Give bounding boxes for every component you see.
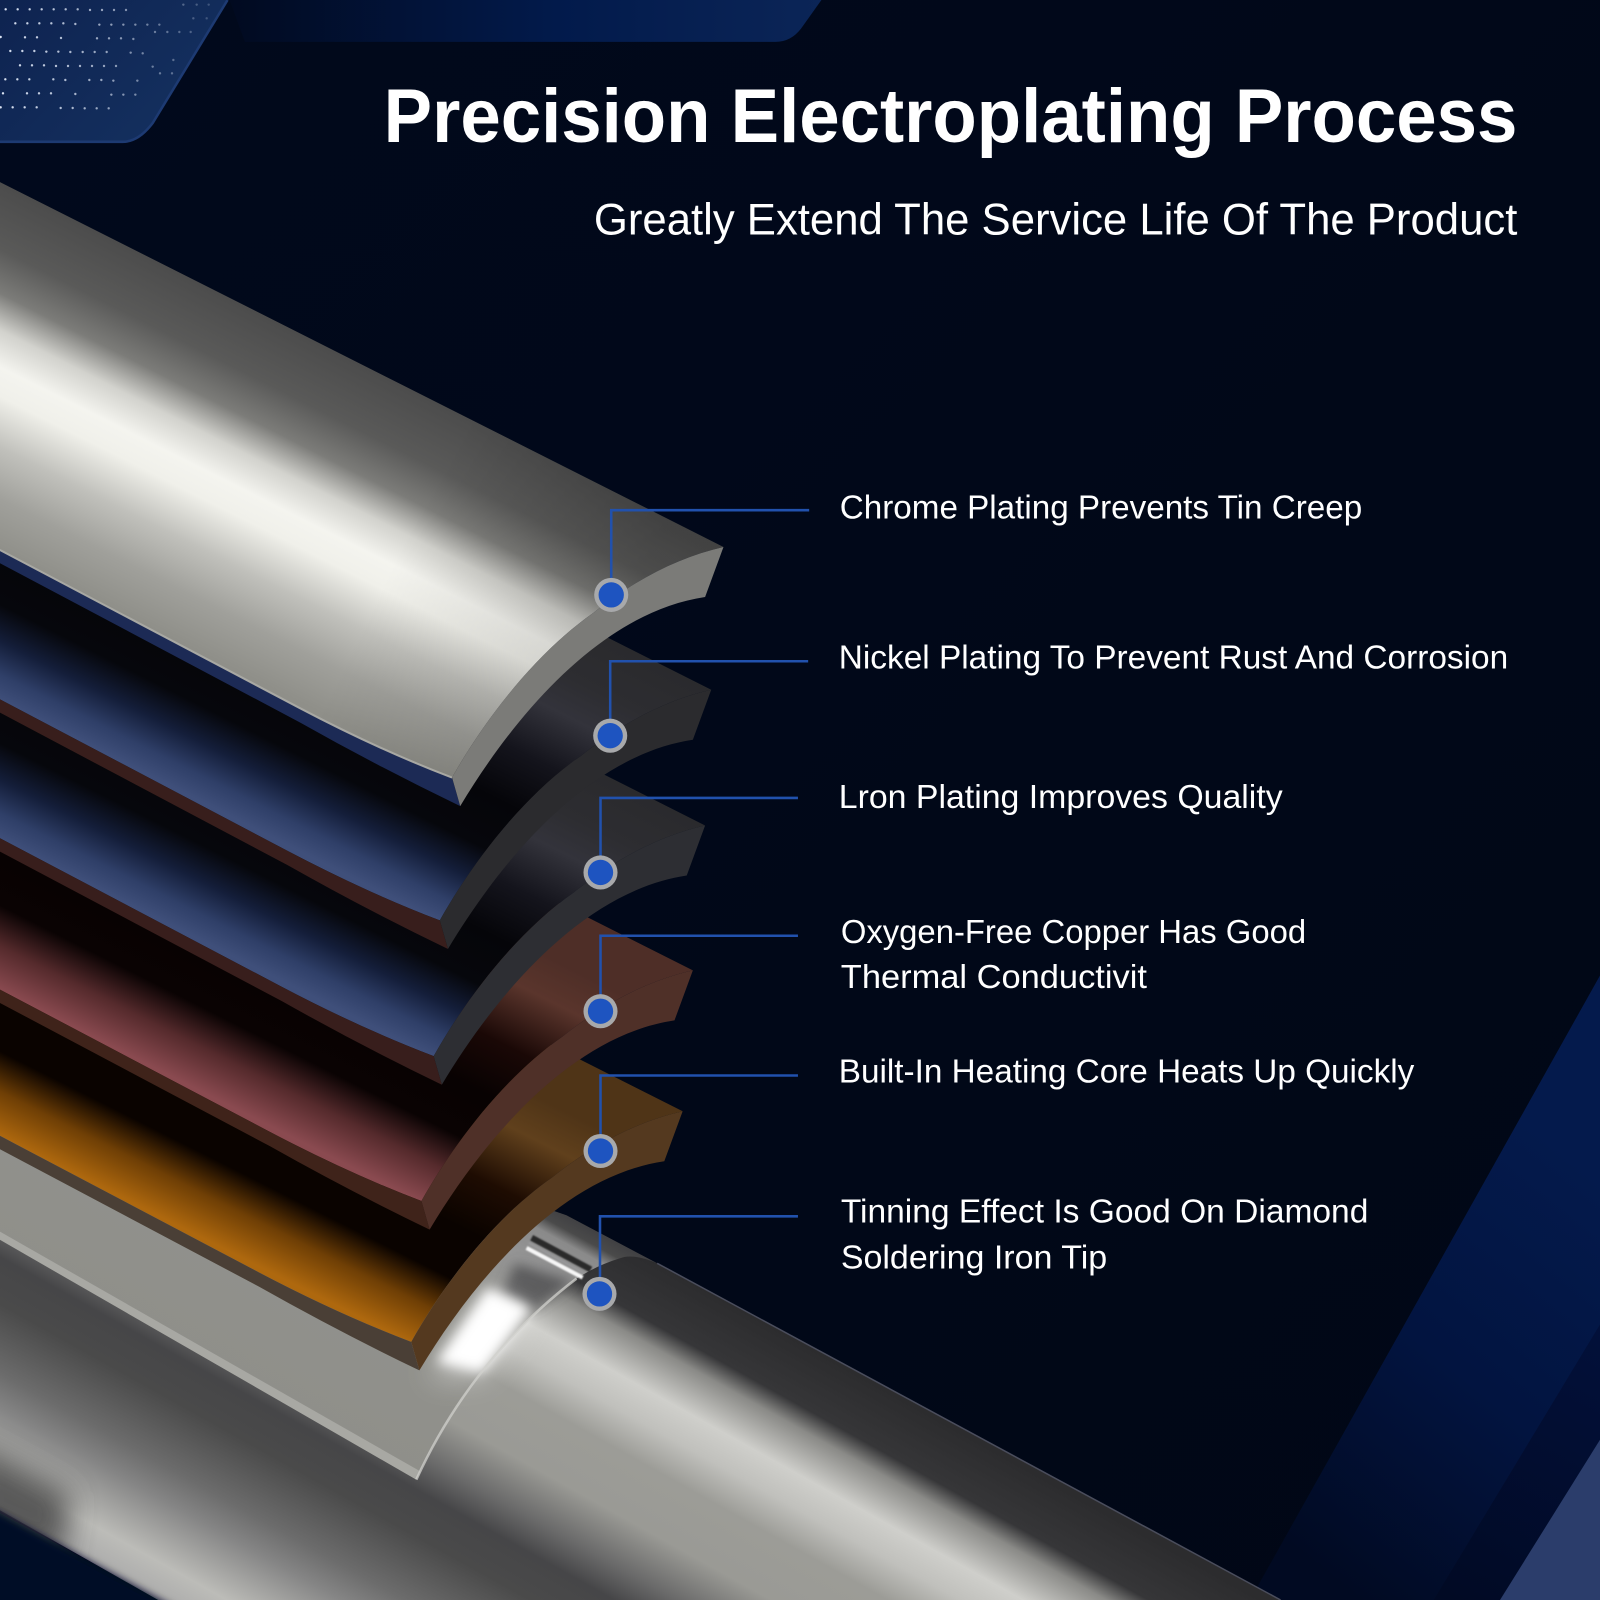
- label: tinning effect: Tinning Effect Is Good On Diamond: [841, 1193, 1368, 1230]
- collar step stripes: [527, 1238, 591, 1278]
- collar arc edge: [416, 1279, 577, 1480]
- callout 6 leader and marker: [582, 1216, 798, 1311]
- collar soft glow: [429, 1291, 531, 1378]
- callout 2 leader and marker: [593, 661, 808, 753]
- callout 1 leader and marker: [594, 510, 809, 612]
- decorative panel: bottom right blue planes: [1250, 976, 1600, 1600]
- label: iron plating: Lron Plating Improves Quality: [839, 779, 1283, 816]
- label: tinning effect: Soldering Iron Tip: [841, 1239, 1107, 1276]
- decorative panel: top bar: [230, 0, 821, 42]
- rod soft lower edge: [0, 1496, 179, 1600]
- label: nickel plating: Nickel Plating To Prevent Rust And Corrosion: [839, 639, 1508, 676]
- callout 4 leader and marker: [583, 936, 798, 1028]
- label: oxygen-free copper: Oxygen-Free Copper Has Good: [841, 914, 1306, 951]
- callout 3 leader and marker: [583, 798, 798, 889]
- label: oxygen-free copper: [841, 914, 1306, 996]
- label: oxygen-free copper: Thermal Conductivit: [841, 959, 1148, 996]
- subtitle: Greatly Extend The Service Life Of The Product: [594, 194, 1518, 245]
- layer: oxygen-free copper: [0, 554, 693, 1230]
- collar highlight: [437, 1288, 531, 1372]
- rod left shading: [0, 1439, 71, 1561]
- label: chrome plating: Chrome Plating Prevents Tin Creep: [840, 489, 1362, 526]
- label: tinning effect: [841, 1193, 1368, 1276]
- decorative panel: top left dotted shape: [0, 0, 228, 142]
- title: Precision Electroplating Process: [384, 74, 1517, 159]
- layer: brass heating core: [0, 695, 683, 1370]
- label: heating core: Built-In Heating Core Heats Up Quickly: [839, 1054, 1414, 1091]
- collar shaded area behind stripes: [502, 1263, 574, 1310]
- callout 5 leader and marker: [583, 1076, 798, 1168]
- layer: chrome plating: [0, 131, 723, 806]
- collar lower light band: [0, 1232, 420, 1480]
- layer: nickel plating: [0, 273, 711, 949]
- tinned collar: [0, 1020, 657, 1480]
- soldering iron tip core rod: [0, 1020, 1281, 1600]
- layer: iron plating: [0, 409, 705, 1085]
